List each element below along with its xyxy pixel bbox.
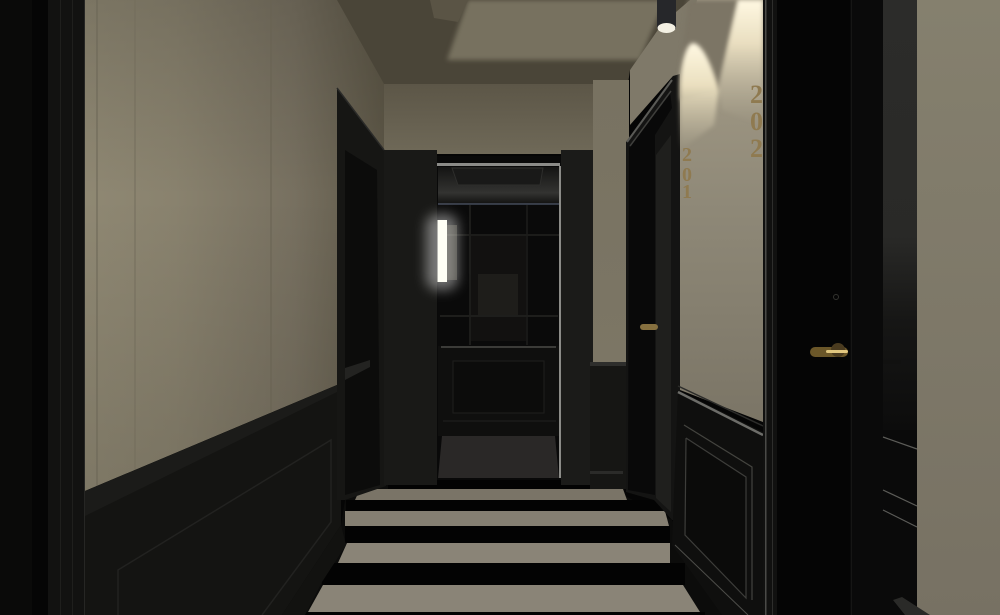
room number 202: 0 <box>750 107 763 136</box>
room number 202 <box>750 80 763 163</box>
far right baseboard corner <box>893 597 930 615</box>
right wainscot panel <box>672 386 763 615</box>
back wall <box>383 84 595 154</box>
gold door handle 202 <box>810 343 848 357</box>
ceiling <box>336 0 690 84</box>
room number 201 <box>682 144 692 203</box>
left wainscot panel <box>85 385 346 615</box>
foreground right door frame and leaf <box>763 0 917 615</box>
room number 202: 2 <box>750 134 763 163</box>
right door 201 <box>626 74 680 520</box>
foreground left door frame <box>0 0 85 615</box>
elevator interior <box>433 156 562 480</box>
right wall <box>630 0 763 422</box>
door handle 201 <box>640 324 658 330</box>
room number 201: 1 <box>682 181 692 203</box>
ceiling downlight <box>657 0 676 33</box>
room number 202: 2 <box>750 80 763 109</box>
left wall <box>85 0 384 491</box>
elevator left door panel <box>384 150 437 485</box>
room number 201: 2 <box>682 144 692 166</box>
wall column right of elevator <box>593 80 629 365</box>
elevator wall sconce <box>426 214 458 290</box>
far right wall <box>917 0 1000 615</box>
back wainscot <box>590 362 626 489</box>
left door <box>337 88 386 500</box>
room number 201: 0 <box>682 164 692 186</box>
striped carpet <box>282 478 722 615</box>
elevator right door panel <box>561 150 593 485</box>
